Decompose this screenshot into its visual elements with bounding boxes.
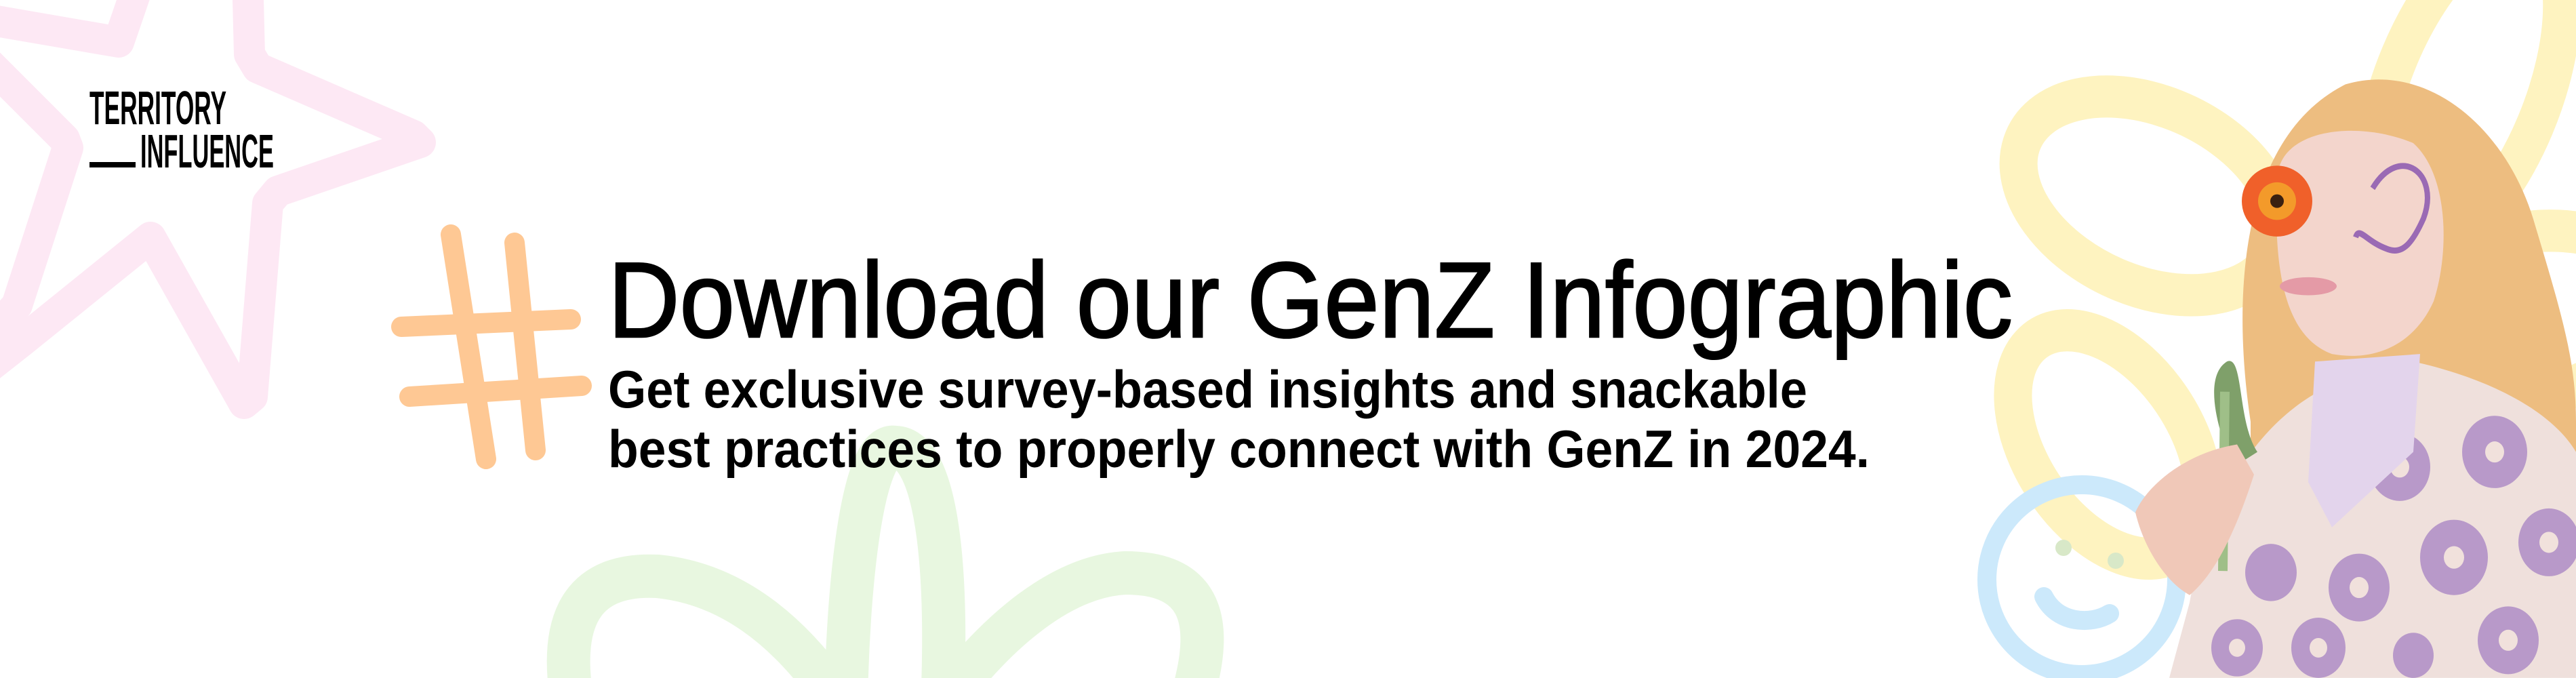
- decorative green flower: [569, 447, 1202, 678]
- jacket: [2169, 361, 2576, 678]
- lips: [2280, 277, 2337, 296]
- text: INFLUENCE: [140, 125, 274, 178]
- photo: girl with tulip: [2135, 79, 2576, 678]
- icon: orange hashtag: [401, 235, 582, 459]
- subtitle text block: Get exclusive survey-based insights and snackable: [608, 359, 1807, 419]
- jacket flower pattern: [2211, 416, 2576, 678]
- decorative pink star outline: [0, 0, 420, 403]
- tulip flower: [2242, 165, 2312, 237]
- subtitle text block: best practices to properly connect with GenZ in 2024.: [608, 419, 1870, 479]
- logo: Territory Influence: [89, 81, 274, 178]
- face: [2276, 131, 2444, 356]
- logo: Territory Influence: TERRITORY: [89, 81, 226, 134]
- icon: blue smiley: [1987, 485, 2177, 675]
- title: Download our GenZ Infographic: [608, 241, 2013, 360]
- hair: [2242, 79, 2576, 572]
- face paint: [2356, 166, 2428, 251]
- subtitle text block: [608, 359, 1870, 479]
- tulip stem and leaf: [2214, 361, 2257, 467]
- turtleneck: [2308, 354, 2420, 527]
- hand: [2135, 444, 2254, 595]
- decorative yellow flower: [1975, 0, 2576, 599]
